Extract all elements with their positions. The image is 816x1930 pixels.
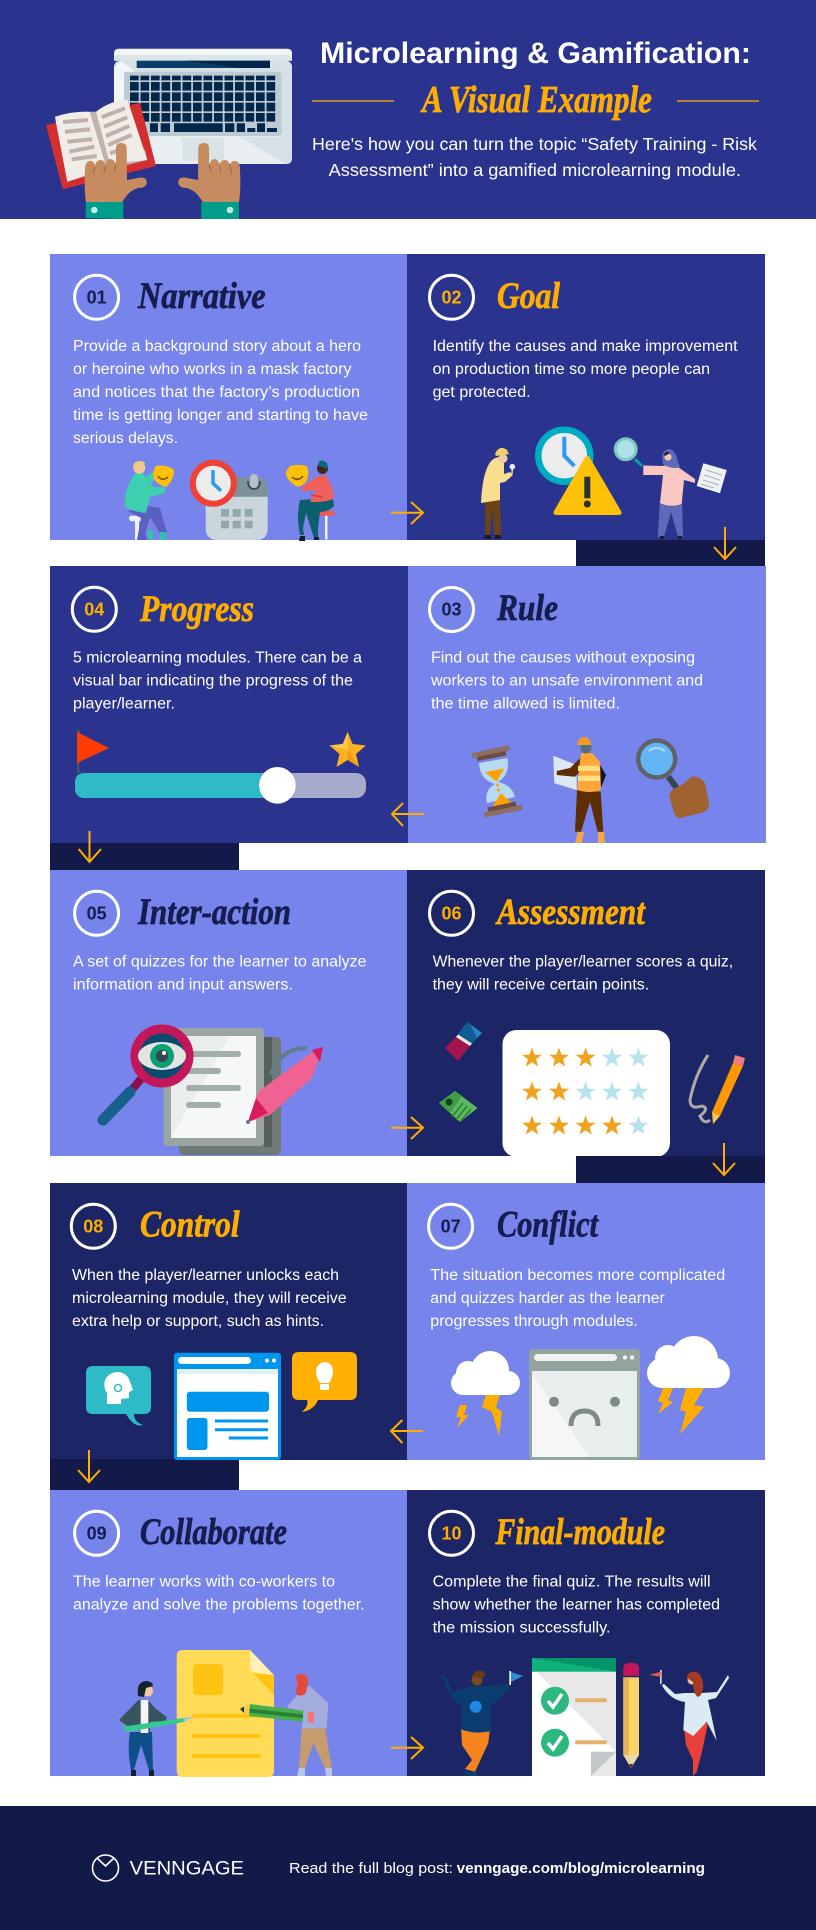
intro text	[312, 134, 757, 180]
body text: or heroine who works in a mask factory	[73, 361, 352, 378]
illustration: man with flag	[442, 1671, 523, 1776]
body text: information and input answers.	[73, 977, 293, 994]
panel: 03 rule	[408, 566, 766, 843]
body text	[73, 954, 366, 994]
illustration: woman with magnifier	[615, 439, 727, 539]
illustration: yellow document	[177, 1650, 274, 1777]
connector block 06 to 07	[576, 1156, 765, 1183]
body text: microlearning module, they will receive	[72, 1290, 347, 1307]
illustration: storm cloud left	[451, 1351, 520, 1436]
arrow: 01 to 02	[391, 502, 423, 524]
body text: serious delays.	[73, 430, 178, 447]
illustration: worker with map	[553, 737, 606, 843]
illustration: clock and warning sign	[538, 430, 622, 515]
arrow: 09 to 10	[391, 1737, 423, 1759]
illustration: hand with magnifier	[638, 740, 709, 818]
step number 05	[75, 891, 119, 935]
icon: left hand	[85, 143, 147, 219]
body text: and quizzes harder as the learner	[430, 1290, 665, 1307]
step number 04	[72, 587, 116, 631]
body text: The learner works with co-workers to	[73, 1574, 335, 1591]
step number 09	[75, 1511, 119, 1555]
panel: 08 control	[50, 1183, 407, 1490]
body text	[433, 954, 733, 994]
body text: and notices that the factory’s production	[73, 384, 360, 401]
logo mark	[92, 1855, 118, 1881]
step number 10: 10	[441, 1524, 462, 1544]
body text: analyze and solve the problems together.	[73, 1597, 365, 1614]
connector block 04 to 05	[50, 843, 239, 870]
step number 05: 05	[87, 904, 107, 924]
panel: 06 assessment	[407, 870, 765, 1157]
heading: Control: Control	[140, 1205, 240, 1246]
body text: get protected.	[433, 384, 531, 401]
step number 08: 08	[83, 1216, 103, 1236]
illustration: seated actor with mask	[286, 461, 335, 541]
body text: show whether the learner has completed	[433, 1597, 720, 1614]
body text: progresses through modules.	[430, 1313, 638, 1330]
body text: Whenever the player/learner scores a quiz,	[433, 954, 733, 971]
icon: idea chat bubble	[292, 1352, 357, 1412]
heading: Rule: Rule	[496, 588, 558, 629]
body text: The situation becomes more complicated	[430, 1267, 725, 1284]
heading: Final-module: Final-module	[495, 1512, 665, 1553]
illustration: clock and calendar	[193, 463, 268, 540]
arrow: 07 to 08	[391, 1420, 423, 1443]
illustration: woman with pen	[119, 1681, 195, 1776]
body text	[433, 1574, 720, 1637]
step number 02: 02	[441, 288, 462, 308]
intro text: Assessment” into a gamified microlearning module.	[329, 160, 741, 180]
arrow: 06 to 07	[713, 1143, 735, 1175]
body text	[73, 650, 362, 713]
panel: 04 progress	[50, 566, 408, 843]
body text: visual bar indicating the progress of the	[73, 673, 353, 690]
footer band	[0, 1806, 816, 1930]
icon: laptop	[114, 49, 292, 164]
illustration: woman with flag	[649, 1670, 729, 1776]
body text	[430, 1267, 725, 1330]
body text: they will receive certain points.	[433, 977, 649, 994]
illustration: pencil	[623, 1663, 639, 1768]
icon: right hand	[178, 143, 240, 219]
blog link text	[289, 1860, 705, 1877]
icon: sharpener	[439, 1091, 478, 1122]
blog link text: Read the full blog post:	[289, 1860, 453, 1877]
logo wordmark: VENNGAGE	[130, 1859, 244, 1880]
body text: the time allowed is limited.	[431, 696, 620, 713]
arrow: 03 to 04	[392, 803, 424, 826]
icon: open book	[46, 99, 156, 189]
step number 08	[71, 1204, 115, 1248]
body text: A set of quizzes for the learner to analyze	[73, 954, 366, 971]
body text: on production time so more people can	[433, 361, 710, 378]
connector block 02 to 03	[576, 540, 765, 566]
heading: Goal: Goal	[497, 276, 561, 317]
body text	[73, 338, 368, 447]
illustration: storm cloud right	[647, 1336, 730, 1434]
arrow: 02 to 03	[714, 527, 736, 559]
body text: time is getting longer and starting to have	[73, 407, 368, 424]
connector block 08 to 09	[50, 1459, 239, 1490]
body text: extra help or support, such as hints.	[72, 1313, 324, 1330]
heading: Progress: Progress	[139, 589, 254, 630]
icon: eraser	[445, 1022, 482, 1061]
panel: 01 narrative	[50, 254, 407, 541]
step number 03: 03	[441, 600, 462, 620]
illustration: hourglass	[472, 748, 522, 815]
arrow: 04 to 05	[79, 831, 101, 862]
panel: 05 inter-action	[50, 870, 407, 1156]
icon: browser window	[174, 1353, 281, 1460]
panel: 02 goal	[407, 254, 765, 540]
heading: Conflict: Conflict	[497, 1205, 599, 1246]
step number 06	[430, 891, 474, 935]
body text: the mission successfully.	[433, 1620, 611, 1637]
step number 06: 06	[441, 904, 462, 924]
heading: Inter-action: Inter-action	[137, 892, 291, 933]
header band	[0, 0, 816, 219]
intro text: Here's how you can turn the topic “Safety Training - Risk	[312, 134, 757, 154]
icon: support chat bubble	[86, 1366, 151, 1426]
body text: player/learner.	[73, 696, 175, 713]
body text: Provide a background story about a hero	[73, 338, 361, 355]
arrow: 05 to 06	[391, 1117, 423, 1139]
heading: Collaborate: Collaborate	[140, 1512, 287, 1553]
illustration: inspector man	[481, 448, 515, 539]
icon: pencil and scribble	[690, 1055, 745, 1124]
body text	[433, 338, 738, 401]
subtitle: A Visual Example	[420, 79, 652, 121]
step number 02	[430, 275, 474, 319]
panel: 09 collaborate	[50, 1490, 407, 1777]
score card	[502, 1030, 670, 1157]
step number 01	[75, 275, 119, 319]
blog link text: venngage.com/blog/microlearning	[457, 1860, 705, 1877]
step number 04: 04	[84, 600, 104, 620]
step number 07: 07	[441, 1216, 461, 1236]
illustration: man with pencil	[240, 1674, 332, 1776]
body text: When the player/learner unlocks each	[72, 1267, 339, 1284]
step number 03	[430, 588, 474, 632]
body text: Complete the final quiz. The results will	[433, 1574, 711, 1591]
body text	[430, 650, 703, 713]
step number 07	[429, 1204, 473, 1248]
icon: start flag	[77, 730, 109, 773]
heading: Assessment: Assessment	[495, 892, 646, 933]
body text: Find out the causes without exposing	[431, 650, 695, 667]
body text: Identify the causes and make improvement	[433, 338, 738, 355]
step number 01: 01	[87, 288, 107, 308]
body text: workers to an unsafe environment and	[430, 673, 703, 690]
step number 10	[430, 1511, 474, 1555]
illustration: checklist paper	[532, 1658, 616, 1776]
title: Microlearning & Gamification:	[320, 37, 751, 70]
body text	[73, 1574, 365, 1614]
progress bar	[75, 730, 366, 804]
illustration: actor with mask	[125, 461, 174, 540]
panel: 07 conflict	[407, 1183, 765, 1460]
body text	[72, 1267, 347, 1330]
heading: Narrative: Narrative	[137, 276, 266, 317]
icon: goal star	[330, 732, 366, 767]
panel: 10 final module	[407, 1490, 765, 1776]
illustration: document with magnifier and pen	[103, 1028, 323, 1155]
illustration: sad browser window	[529, 1349, 640, 1460]
arrow: 08 to 09	[78, 1450, 100, 1482]
step number 09: 09	[87, 1524, 107, 1544]
body text: 5 microlearning modules. There can be a	[73, 650, 362, 667]
